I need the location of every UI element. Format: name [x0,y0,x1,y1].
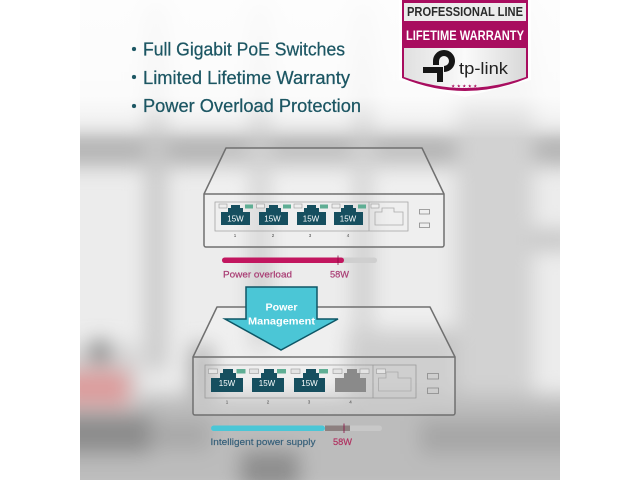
badge: lifetime warranty band: LIFETIME WARRANTY [406,28,524,43]
port labels [219,379,318,388]
power bar: intelligent supply: Intelligent power supply [210,437,316,448]
switch: top, overloaded: 2 [272,233,275,238]
badge: professional line band: PROFESSIONAL LINE [407,5,523,19]
port labels: 15W [301,379,318,388]
port labels: 15W [303,214,320,224]
switch: top, overloaded: 1 [234,233,237,238]
switch: bottom, managed [193,307,455,415]
background: blurred office photo [80,80,560,480]
uplink port [375,208,403,225]
port panel [215,202,408,231]
arrow: power management: Power [266,302,298,314]
uplink port [378,372,411,391]
port labels: 15W [227,214,244,224]
bullet: Limited Lifetime Warranty: Limited Lifetime Warranty [143,68,350,88]
switch: bottom, managed: 4 [349,400,352,404]
switch: bottom, managed: 1 [226,400,229,404]
indicator lights [420,210,430,228]
switch: top, overloaded [204,148,444,247]
switch: bottom, managed: 2 [267,400,270,404]
port labels: 15W [340,214,357,224]
indicator lights [428,374,438,394]
port labels: 15W [264,214,281,224]
switch: top, overloaded: 4 [347,233,350,238]
arrow: power management: Management [248,316,316,328]
bullet: Power Overload Protection: Power Overload Protection [143,96,361,116]
port LEDs [219,204,379,208]
icon: tp-link logo: tp-link [459,59,509,78]
power bar: overload: 58W [330,270,349,280]
port labels: 15W [219,379,236,388]
port LEDs [208,369,386,374]
port labels: 15W [259,379,276,388]
port 4 disabled [335,369,366,392]
power bar: overload [222,256,377,280]
port labels [227,214,357,224]
power bar: intelligent supply: 58W [333,437,352,448]
bullet: Full Gigabit PoE Switches: Full Gigabit PoE Switches [143,40,345,60]
power bar: overload: Power overload [223,270,292,280]
arrow: power management [225,287,338,350]
port panel [205,365,416,398]
power bar: intelligent supply [210,424,382,448]
ports 1-4 [221,205,363,225]
switch: top, overloaded: 3 [309,233,312,238]
badge: professional line lifetime warranty [399,0,531,97]
switch: bottom, managed: 3 [308,400,311,404]
bullet list [132,40,361,116]
ports 1-3 active [211,369,325,392]
badge: stars: ★★★★★ [451,84,479,88]
